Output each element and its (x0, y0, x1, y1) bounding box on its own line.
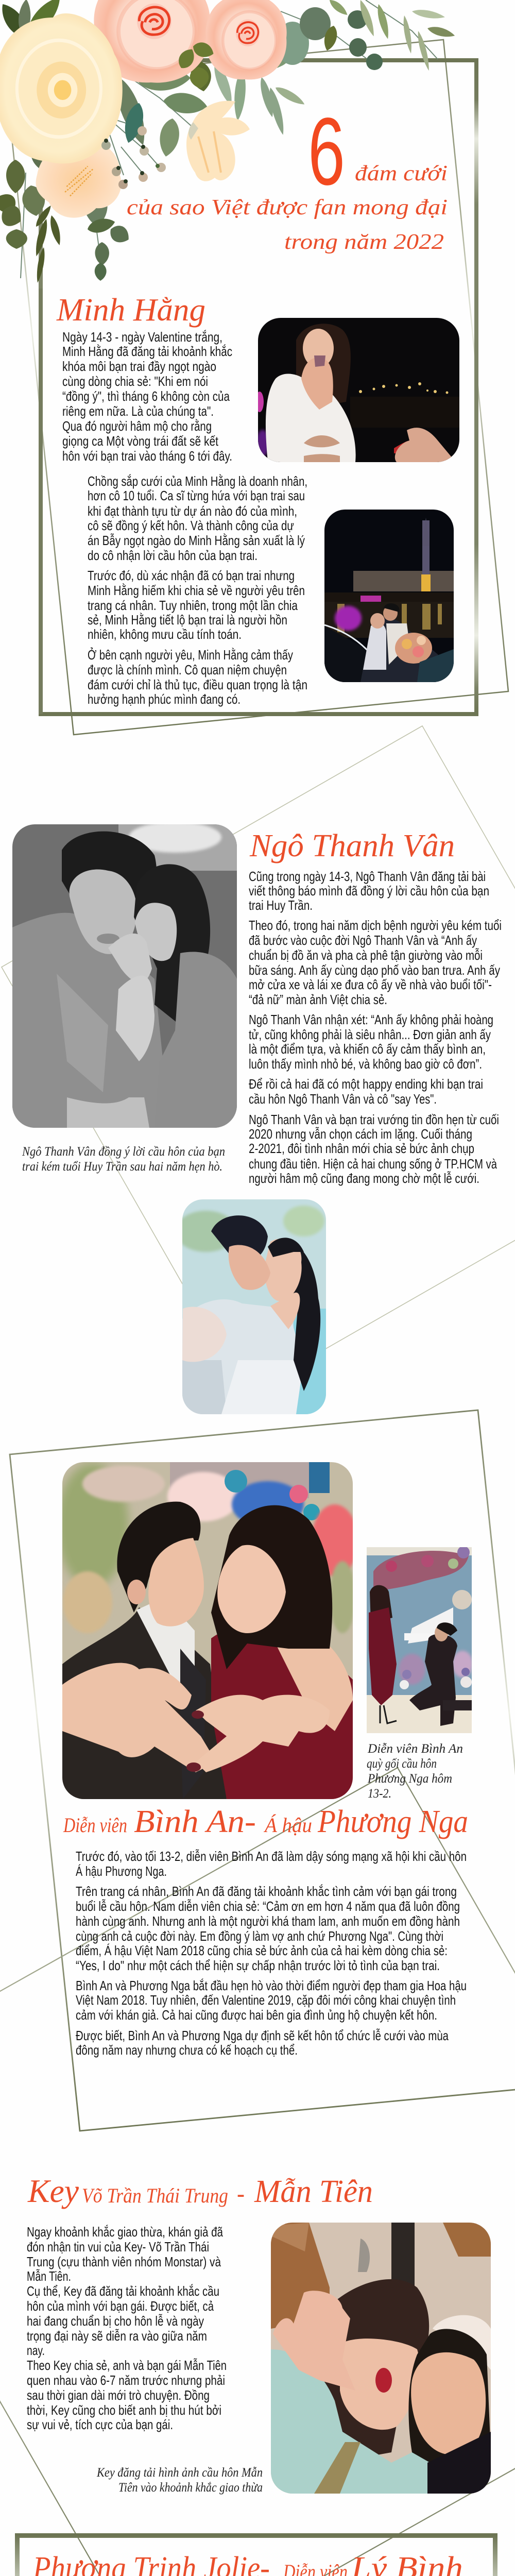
text block: fiancé: hơn cô 10 tuổi. Ca sĩ từng hứa với bạn trai sau (88, 488, 305, 503)
text block: Cụ thể, Key đã đăng tải khoảnh khắc cầu (27, 2283, 219, 2299)
title: của sao Việt được fan mong đại (127, 196, 448, 219)
photo: black and white portrait (12, 822, 237, 1128)
text block: fiancé: sẻ, Minh Hằng tiết lộ bạn trai là người hồn (88, 612, 287, 628)
caption: Tiên vào khoảnh khắc giao thừa (118, 2481, 263, 2495)
text block: “đả nữ” màn ảnh Việt chia sẻ. (249, 992, 387, 1007)
text block: hai đang chuẩn bị cho hôn lễ và ngày (27, 2313, 204, 2329)
text block: intro: riêng em nữa. Là của chúng ta". (62, 403, 214, 419)
text block: sự vui vẻ, tích cực của bạn gái. (27, 2417, 173, 2432)
heading (63, 1804, 468, 1839)
text block: nay. (27, 2343, 45, 2358)
text block: fiancé: Ở bên cạnh người yêu, Minh Hằng cảm thấy (88, 647, 293, 663)
photo: kneeling proposal (367, 1546, 473, 1733)
text block: Á hậu Phương Nga. (76, 1863, 167, 1879)
heading: Mẫn Tiên (254, 2174, 373, 2209)
text block: trai Huy Trần. (249, 897, 313, 913)
heading (27, 2173, 373, 2209)
caption (96, 2466, 263, 2495)
text block: Theo Key chia sẻ, anh và bạn gái Mẫn Tiên (27, 2358, 227, 2373)
text block: intro: hôn với bạn trai vào tháng 6 tới đây. (62, 448, 232, 464)
photo: kiss on the cheek (175, 1199, 326, 1414)
text block: Ngay khoảnh khắc giao thừa, khán giả đã (27, 2224, 223, 2240)
text block (27, 2224, 227, 2432)
heading: Ngô Thanh Vân: Ngô Thanh Vân (249, 828, 455, 863)
title (127, 98, 448, 254)
heading: - (237, 2179, 245, 2208)
caption: Key đăng tải hình ảnh cầu hôn Mẫn (96, 2466, 263, 2480)
floral cluster: top (0, 0, 456, 283)
section: Ngô Thanh Vân (12, 822, 502, 1414)
text block: fiancé: do cô nhận lời cầu hôn của bạn trai. (88, 548, 258, 563)
section: Phương Trinh Jolie - Lý Bình (32, 2551, 464, 2576)
caption: trai kém tuổi Huy Trần sau hai năm hẹn hò. (22, 1160, 222, 1174)
text block: đông năm nay nhưng chưa có kế hoạch cụ thể. (76, 2042, 298, 2058)
text block: fiancé: Trước đó, dù xác nhận đã có bạn trai nhưng (88, 568, 295, 583)
text block: fiancé: Chồng sắp cưới của Minh Hằng là doanh nhân, (88, 473, 307, 489)
text block: intro: giọng ca Một vòng trái đất sẽ kết (62, 433, 219, 449)
caption: Phương Nga hôm (367, 1772, 452, 1786)
text block: fiancé: trang cá nhân. Tuy nhiên, trong một lần chia (88, 598, 298, 613)
caption (22, 1145, 225, 1174)
text block: thời, Key cũng cho biết anh bị thu hút bởi (27, 2402, 221, 2418)
text block: intro: Minh Hằng đã đăng tải khoảnh khắc (62, 344, 232, 359)
text block: fiancé: hưởng hạnh phúc mình đang có. (88, 691, 241, 707)
title: đám cưới (355, 162, 448, 185)
section: Bình An - Phương Nga (57, 1462, 473, 2058)
title: trong năm 2022 (284, 230, 444, 254)
photo: river kiss (324, 510, 454, 682)
text block: fiancé: đám cưới chỉ là thủ tục, điều quan trọng là tận (88, 677, 307, 692)
caption: Diễn viên Bình An (367, 1742, 463, 1756)
text block: cầu hôn Ngô Thanh Vân và cô "say Yes". (249, 1091, 437, 1107)
text block: fiancé: khi đạt thành tựu từ dự án nào đó của mình, (88, 503, 297, 519)
section: Minh Hằng (56, 98, 459, 707)
text block: sau thời gian dài mới trò chuyện. Đồng (27, 2387, 210, 2403)
text block: fiancé: nhiên, không mưu cầu tính toán. (88, 626, 242, 642)
heading: Diễn viên (63, 1814, 127, 1837)
photo: selfie (271, 2223, 491, 2494)
text block: intro (62, 329, 232, 464)
text block: intro: Ngày 14-3 - ngày Valentine trắng, (62, 329, 222, 345)
text block: fiancé: được là chính mình. Cô quan niệm chuyện (88, 662, 287, 677)
text block: intro: “đồng ý", thì tháng 6 không còn của (62, 388, 230, 404)
heading: Phương Nga (317, 1804, 468, 1839)
caption: quỳ gối cầu hôn (367, 1757, 437, 1771)
section: Key - Mẫn Tiên (27, 2173, 491, 2495)
heading: Key (27, 2173, 79, 2209)
text block: trọng đại này sẽ diễn ra vào giữa năm (27, 2328, 207, 2344)
text block: Mẫn Tiên. (27, 2268, 71, 2284)
text block (76, 1849, 467, 2058)
text block: intro: khóa môi bạn trai đầy ngọt ngào (62, 359, 216, 374)
text block: fiancé: cô sẽ đồng ý kết hôn. Và thành công của dự (88, 518, 294, 533)
heading: Minh Hằng: Minh Hằng (56, 293, 205, 328)
heading: Võ Trần Thái Trung (82, 2184, 228, 2207)
caption: Ngô Thanh Vân đồng ý lời cầu hôn của bạn (22, 1145, 225, 1159)
text block: fiancé (88, 473, 307, 707)
title: 6 (308, 98, 345, 205)
text block: fiancé: án Bẫy ngọt ngào do Minh Hằng sản xuất là lý (88, 533, 305, 548)
text block: hôn của mình với bạn gái. Được biết, cả (27, 2298, 214, 2314)
text block: fiancé: Minh Hằng hiếm khi chia sẻ về người yêu trên (88, 583, 305, 598)
text block: quen nhau vào 6-7 năm trước nhưng phải (27, 2372, 225, 2388)
heading: Á hậu (263, 1814, 312, 1837)
photo: heart hands couple (57, 1462, 358, 1799)
text block: Trung (cựu thành viên nhóm Monstar) và (27, 2254, 221, 2269)
photo: proposal at night (255, 318, 459, 462)
caption (367, 1742, 463, 1801)
text block: intro: cùng dòng chia sẻ: "Khi em nói (62, 374, 208, 389)
text block (249, 869, 502, 1186)
heading: Bình An- (134, 1804, 256, 1839)
text block: đón nhận tin vui của Key- Võ Trần Thái (27, 2239, 209, 2255)
heading (32, 2551, 463, 2576)
text block: intro: Qua đó người hâm mộ cho rằng (62, 418, 212, 434)
caption: 13-2. (368, 1787, 391, 1801)
